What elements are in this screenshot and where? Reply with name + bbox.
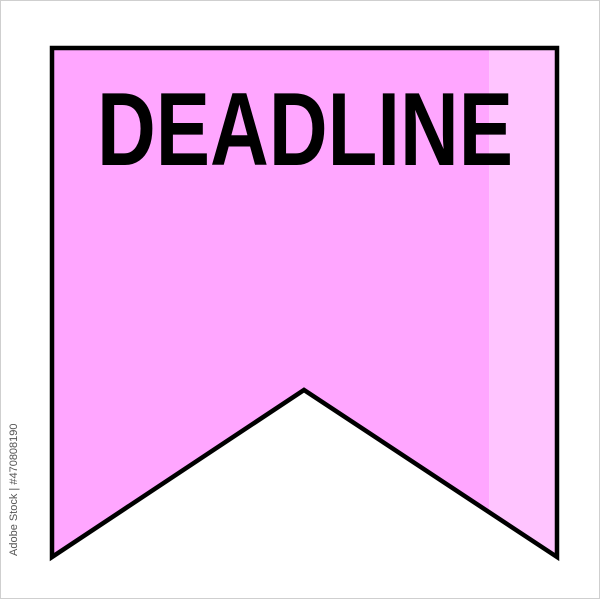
ribbon fill	[52, 48, 557, 557]
ribbon highlight strip	[489, 48, 557, 557]
ribbon outline	[52, 48, 557, 557]
watermark id text: Adobe Stock | #470808190	[8, 423, 20, 556]
ribbon banner	[52, 48, 557, 557]
